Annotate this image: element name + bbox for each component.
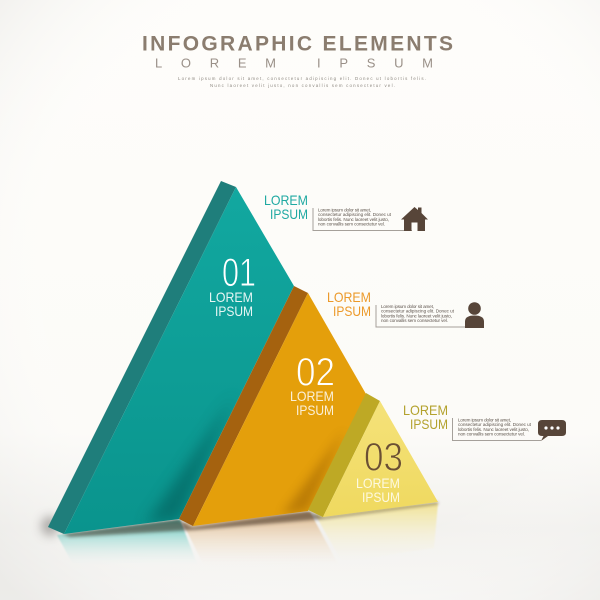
segment 3 label: LOREM — [356, 475, 400, 491]
callout 2 heading: IPSUM — [333, 303, 371, 319]
pyramid — [48, 181, 438, 534]
callout 2 text: Lorem ipsum dolor sit amet, — [381, 304, 434, 309]
callout 1 — [264, 192, 428, 231]
callout 1 text: lobortis felis. Nunc laoreet velit justo, — [318, 217, 389, 222]
intro text — [178, 76, 426, 88]
segment 3 label: IPSUM — [362, 489, 400, 505]
callout 1 text: consectetur adipiscing elit. Donec ut — [318, 212, 392, 217]
subtitle: LOREM IPSUM — [155, 56, 433, 70]
callout 3 — [403, 402, 566, 441]
segment 1: teal — [48, 181, 294, 534]
callout 3 text — [458, 418, 532, 437]
callout 3 text: non convallis sem consectetur vel. — [458, 432, 525, 437]
segment 2: orange — [179, 286, 366, 526]
callout 2 — [327, 289, 484, 328]
intro text: Nunc laoreet velit justo, non convallis sem consectetur vel. — [210, 83, 395, 88]
callout 3 heading: IPSUM — [410, 416, 448, 432]
callout 2 heading: LOREM — [327, 289, 371, 305]
callout 2 heading — [327, 289, 371, 319]
callout 1 heading: LOREM — [264, 192, 308, 208]
callout 2 text: consectetur adipiscing elit. Donec ut — [381, 309, 455, 314]
callout 3 heading — [403, 402, 448, 432]
intro text: Lorem ipsum dolor sit amet, consectetur adipiscing elit. Donec ut lobortis felis. — [178, 76, 426, 81]
segment 2 label: IPSUM — [296, 402, 334, 418]
callout 3 heading: LOREM — [403, 402, 448, 418]
callout 1 bracket — [313, 208, 412, 230]
callout 1 text — [318, 208, 392, 227]
segment 1 label — [209, 251, 256, 319]
callout 3 text: consectetur adipiscing elit. Donec ut — [458, 422, 532, 427]
title: INFOGRAPHIC ELEMENTS — [142, 32, 453, 56]
icon: house — [401, 207, 428, 231]
segment 2 label — [290, 350, 335, 418]
callout 1 heading — [264, 192, 308, 222]
callout 2 text — [381, 304, 455, 323]
icon: speech bubble — [538, 420, 566, 441]
segment 3 label: 03 — [364, 436, 403, 480]
callout 3 bracket — [452, 418, 541, 440]
segment 2 label: LOREM — [290, 388, 334, 404]
segment 3 label — [356, 436, 403, 505]
floor contact shadows — [41, 502, 438, 537]
segment 1 label: LOREM — [209, 289, 253, 305]
segment 2 label: 02 — [296, 350, 335, 394]
callout 3 text: Lorem ipsum dolor sit amet, — [458, 418, 511, 422]
callout 2 text: non convallis sem consectetur vel. — [381, 318, 448, 323]
segment 3: yellow — [308, 393, 438, 517]
callout 1 text: Lorem ipsum dolor sit amet, — [318, 208, 371, 212]
icon: person — [465, 302, 484, 328]
callout 2 text: lobortis felis. Nunc laoreet velit justo, — [381, 313, 452, 318]
callout 1 heading: IPSUM — [270, 206, 308, 222]
callout 2 bracket — [376, 305, 476, 327]
segment 1 label: 01 — [222, 251, 256, 295]
floor reflections — [57, 503, 438, 566]
segment 1 label: IPSUM — [215, 303, 253, 319]
callout 3 text: lobortis felis. Nunc laoreet velit justo, — [458, 427, 529, 432]
callout 1 text: non convallis sem consectetur vel. — [318, 222, 385, 227]
